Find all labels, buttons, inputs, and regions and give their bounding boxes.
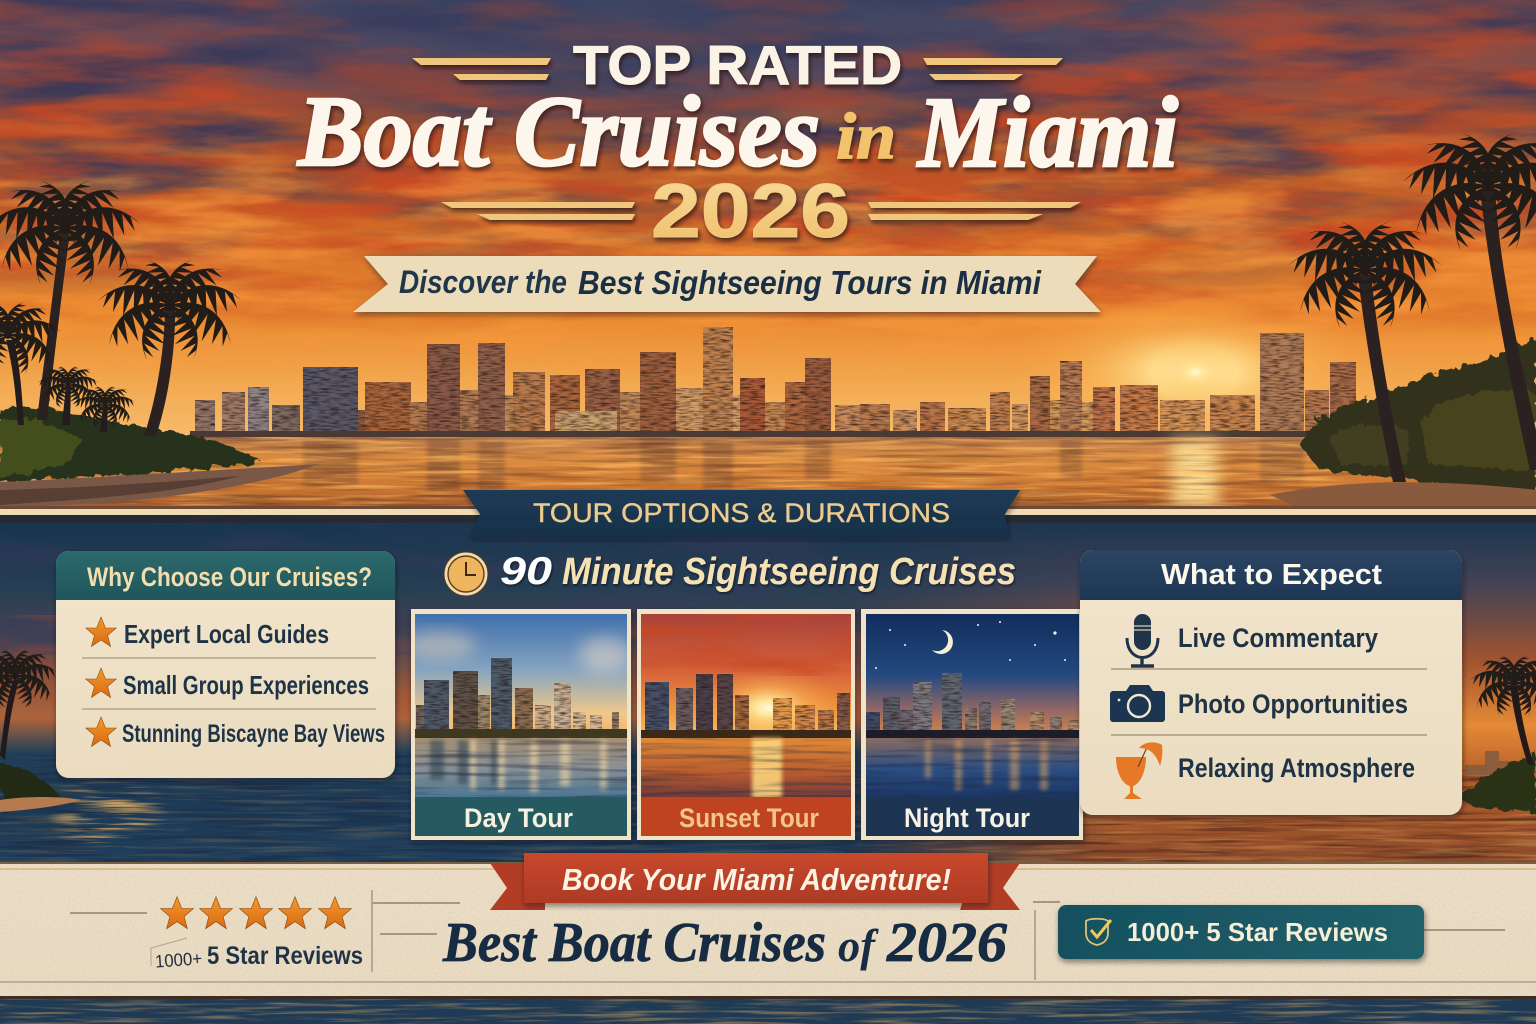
panel header — [1080, 550, 1462, 600]
review stars and count: 5 Star Reviews — [207, 942, 363, 970]
five star rating — [161, 897, 351, 929]
card: night tour: Night Tour — [904, 803, 1030, 833]
red call-to-action ribbon — [490, 853, 1020, 910]
icon: microphone — [1127, 614, 1158, 666]
panel: why choose our cruises: Expert Local Guides — [124, 619, 329, 649]
icon: camera — [1110, 685, 1165, 722]
panel: why choose our cruises: Stunning Biscayne Bay Views — [122, 720, 385, 748]
section ribbon: tour options — [463, 490, 1020, 536]
icon: clock — [444, 552, 488, 596]
section ribbon: tour options: TOUR OPTIONS & DURATIONS — [533, 498, 950, 528]
bay water with reflections — [0, 437, 1536, 512]
lower right island and palm — [1462, 652, 1536, 812]
reviews badge: 1000+ 5 Star Reviews — [1127, 917, 1388, 947]
left shore with foliage and rocks — [0, 406, 320, 508]
script title: Miami — [916, 76, 1178, 188]
panel: what to expect: Photo Opportunities — [1178, 689, 1408, 719]
background: sunset sky — [0, 0, 1536, 452]
shoreline strip — [190, 431, 1320, 438]
script title: in — [836, 100, 896, 173]
bottom water strip — [0, 999, 1536, 1024]
lower section background — [0, 515, 1536, 865]
review stars and count: 1000+ — [154, 948, 203, 972]
panel header — [56, 551, 395, 600]
year — [441, 169, 1081, 254]
panel: what to expect: Live Commentary — [1178, 623, 1378, 653]
cruise heading with clock — [444, 550, 1016, 596]
panel: what to expect: What to Expect — [1161, 559, 1382, 591]
icon: star — [86, 717, 116, 747]
icon: moon — [932, 630, 953, 654]
card: sunset tour — [637, 609, 855, 840]
panel: what to expect: Relaxing Atmosphere — [1178, 753, 1415, 783]
best boat cruises heading: of — [838, 920, 880, 971]
right shore with foliage — [1270, 338, 1536, 510]
best boat cruises heading: Best Boat Cruises — [442, 912, 826, 974]
icon: cocktail — [1116, 742, 1162, 799]
top rated heading: TOP RATED — [573, 34, 902, 96]
bottom band — [0, 862, 1536, 999]
panel: why choose our cruises: Small Group Experiences — [123, 670, 369, 700]
palm trees right — [1286, 127, 1536, 482]
script title: Boat Cruises — [297, 75, 820, 187]
top rated heading — [412, 34, 1063, 96]
card: day tour: Day Tour — [464, 803, 573, 833]
icon: check badge — [1086, 919, 1111, 945]
divider band — [0, 506, 1536, 523]
sun glints on water — [48, 778, 168, 851]
script title — [297, 75, 1178, 188]
card: sunset tour: Sunset Tour — [679, 803, 819, 833]
subtitle ribbon: Best Sightseeing Tours in Miami — [578, 264, 1042, 301]
year: 2026 — [651, 169, 850, 254]
subtitle ribbon — [353, 256, 1101, 312]
card: night tour — [861, 609, 1083, 840]
card: day tour — [404, 609, 631, 840]
hero title — [297, 34, 1178, 254]
panel: why choose our cruises: Why Choose Our Cruises? — [87, 562, 372, 592]
review stars and count — [151, 897, 363, 972]
panel: why choose our cruises — [56, 551, 395, 778]
icon: star — [86, 617, 116, 647]
subtitle ribbon: Discover the — [399, 264, 567, 300]
cruise heading with clock: Minute Sightseeing Cruises — [562, 551, 1016, 593]
cruise heading with clock: 90 — [500, 550, 552, 593]
panel: what to expect — [1080, 550, 1462, 815]
icon: star — [86, 668, 116, 698]
Miami skyline — [195, 327, 1356, 436]
reviews badge — [1058, 905, 1424, 959]
best boat cruises heading: 2026 — [886, 912, 1007, 974]
lower left island and palm — [0, 646, 82, 812]
red call-to-action ribbon: Book Your Miami Adventure! — [562, 862, 951, 897]
palm trees left — [0, 175, 244, 436]
